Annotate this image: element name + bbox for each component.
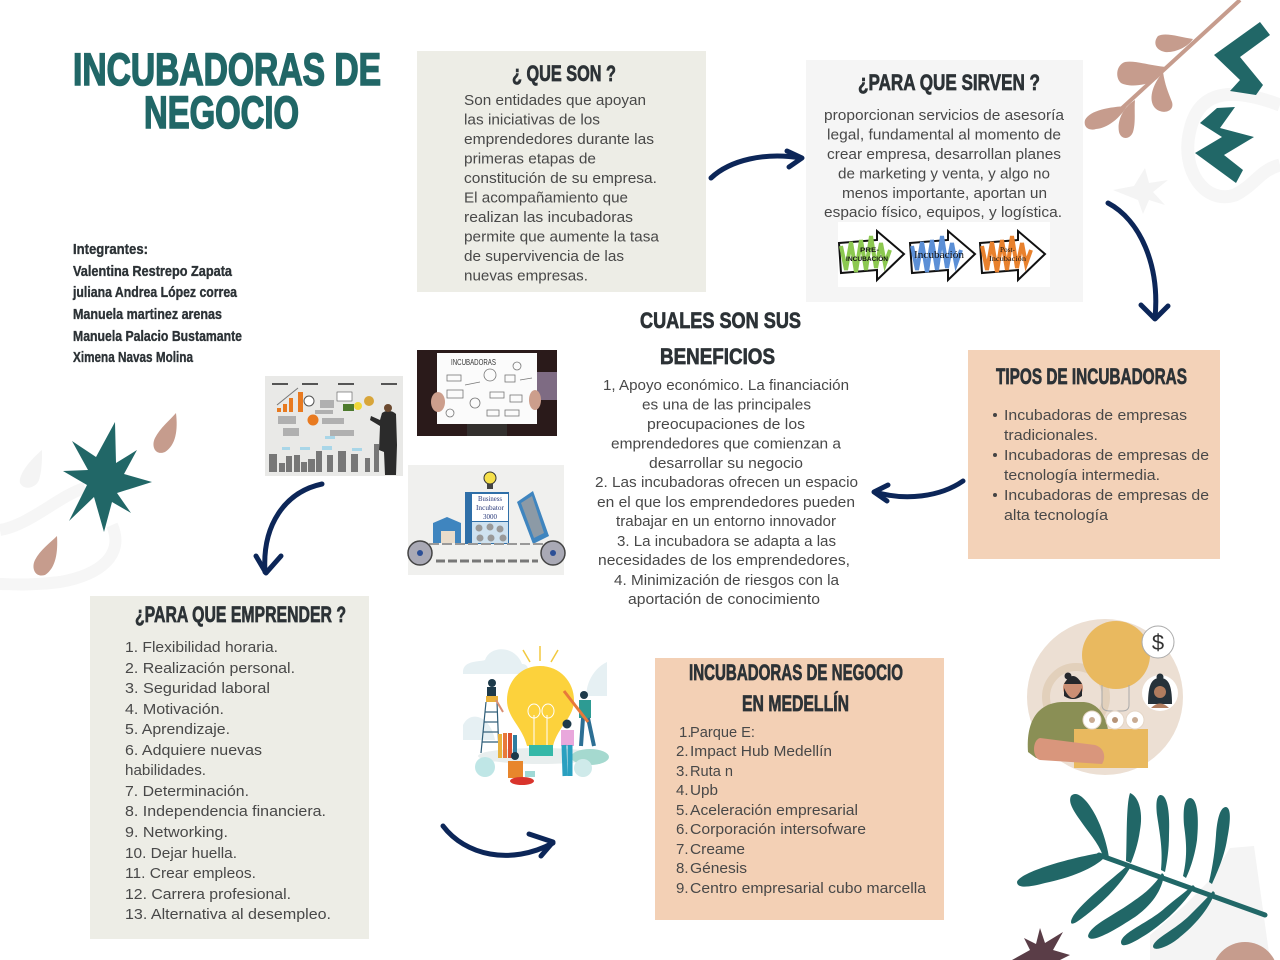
- text: que son: primeras etapas de: [464, 150, 596, 168]
- text: beneficios: es una de las principales: [642, 396, 811, 414]
- list: medellin: 2.: [676, 743, 689, 760]
- text: que son: El acompañamiento que: [464, 190, 628, 206]
- text: para que sirven: de marketing y venta, y algo no: [838, 166, 1050, 182]
- icon: light bulb: [484, 472, 496, 489]
- list: tipos: alta tecnología: [1004, 507, 1109, 524]
- text: beneficios: [595, 377, 858, 608]
- list: medellin: Corporación intersofware: [690, 821, 866, 838]
- heading: medellin: [689, 660, 903, 716]
- list: medellin: 7.: [676, 841, 689, 858]
- heading: cuales son sus beneficios: CUALES SON SUS: [640, 308, 801, 333]
- text: que son: constitución de su empresa.: [464, 170, 657, 187]
- heading: cuales son sus beneficios: BENEFICIOS: [660, 344, 775, 369]
- text: que son: Son entidades que apoyan: [464, 92, 646, 109]
- text: para que sirven: proporcionan servicios de asesoría: [824, 107, 1065, 124]
- list: medellin: Creame: [690, 841, 745, 858]
- list: motivos: 3. Seguridad laboral: [125, 680, 270, 697]
- text: beneficios: 3. La incubadora se adapta a las: [617, 533, 836, 550]
- text: para que sirven: [824, 107, 1065, 221]
- list: motivos: 9. Networking.: [125, 824, 228, 841]
- heading: para que emprender: ¿PARA QUE EMPRENDER ?: [135, 602, 346, 627]
- illustration: entrepreneur with box and bulb: $: [1152, 630, 1164, 655]
- text: beneficios: preocupaciones de los: [647, 416, 805, 433]
- text: beneficios: 2. Las incubadoras ofrecen un espacio: [595, 474, 858, 491]
- title: [73, 44, 381, 138]
- arrow: tipos to beneficios: [874, 481, 963, 501]
- list: motivos: 13. Alternativa al desempleo.: [125, 906, 331, 923]
- list: tipos: Incubadoras de empresas: [1004, 407, 1187, 424]
- list: medellin: Ruta n: [690, 763, 733, 780]
- list: medellin: 4.: [676, 782, 689, 799]
- text: beneficios: desarrollar su negocio: [649, 455, 803, 472]
- heading: medellin: EN MEDELLÍN: [742, 691, 849, 716]
- arrow: bulb to medellin: [443, 826, 553, 856]
- text: beneficios: 1, Apoyo económico. La financiación: [603, 377, 849, 394]
- text: que son: de supervivencia de las: [464, 248, 624, 265]
- heading: para que sirven: ¿PARA QUE SIRVEN ?: [858, 70, 1040, 95]
- text: que son: permite que aumente la tasa: [464, 228, 660, 246]
- team members list: juliana Andrea López correa: [72, 285, 238, 301]
- list: medellin: Upb: [690, 782, 718, 799]
- team members list: Integrantes:: [73, 242, 148, 258]
- title: NEGOCIO: [144, 87, 299, 138]
- text: beneficios: necesidades de los emprendedores,: [598, 552, 850, 569]
- image: business incubator machine: Business: [478, 495, 502, 503]
- text: que son: nuevas empresas.: [464, 268, 588, 284]
- list: motivos: 11. Crear empleos.: [125, 865, 256, 882]
- image: man drawing business chart on wall: [265, 376, 403, 476]
- decoration: bottom right fern: [1012, 793, 1278, 960]
- list: medellin: [676, 724, 927, 897]
- list: tipos: tecnología intermedia.: [1004, 467, 1160, 484]
- team members list: Manuela martinez arenas: [73, 307, 222, 323]
- image: business incubator machine: 3000: [483, 513, 498, 521]
- list: medellin: 8.: [676, 860, 689, 877]
- decoration: left star and drops: [0, 413, 177, 584]
- image: incubation stage arrows: Post-: [1000, 246, 1016, 254]
- image: incubation stage arrows: Incubación: [989, 255, 1027, 263]
- team members list: Manuela Palacio Bustamante: [73, 329, 242, 345]
- text: para que sirven: espacio físico, equipos, y logística.: [824, 204, 1062, 221]
- list: medellin: Génesis: [690, 860, 747, 877]
- arrow: que son to para que sirven: [711, 151, 802, 178]
- list: motivos: 4. Motivación.: [125, 701, 224, 718]
- arrow: para que sirven to tipos: [1108, 203, 1168, 319]
- list: medellin: 9.: [676, 880, 689, 897]
- text: que son: las iniciativas de los: [464, 112, 600, 128]
- image: business incubator machine: [408, 465, 565, 575]
- image: incubation stage arrows: Incubación: [914, 250, 964, 261]
- list: tipos: tradicionales.: [1004, 427, 1098, 444]
- text: para que sirven: menos importante, aportan un: [842, 185, 1047, 202]
- text: beneficios: trabajar en un entorno innovador: [616, 513, 836, 530]
- image: hands holding incubadoras sketch sheet: [417, 350, 557, 436]
- heading: medellin: INCUBADORAS DE NEGOCIO: [689, 660, 903, 685]
- text: beneficios: aportación de conocimiento: [628, 591, 820, 608]
- text: para que sirven: crear empresa, desarrollan planes: [827, 146, 1061, 163]
- image: incubation stage arrows: PRE-: [860, 247, 879, 254]
- list: tipos: [993, 407, 1209, 524]
- list: motivos: habilidades.: [125, 762, 206, 779]
- list: motivos: 10. Dejar huella.: [125, 845, 237, 862]
- heading: tipos: TIPOS DE INCUBADORAS: [996, 364, 1187, 389]
- illustration: entrepreneur with box and bulb: [1027, 619, 1183, 775]
- text: que son: realizan las incubadoras: [464, 209, 633, 226]
- panel: tipos de incubadoras: [968, 350, 1220, 559]
- heading: cuales son sus beneficios: [640, 308, 801, 369]
- list: medellin: Impact Hub Medellín: [690, 743, 832, 760]
- illustration: team around light bulb: [463, 646, 609, 785]
- list: motivos: 5. Aprendizaje.: [125, 721, 230, 738]
- team members list: Valentina Restrepo Zapata: [73, 264, 233, 280]
- image: business incubator machine: Incubator: [476, 504, 505, 512]
- image: incubation stage arrows: [838, 222, 1050, 287]
- list: tipos: Incubadoras de empresas de: [1004, 487, 1209, 504]
- list: tipos: Incubadoras de empresas de: [1004, 447, 1209, 464]
- image: hands holding incubadoras sketch sheet: INCUBADORAS: [451, 358, 496, 367]
- list: medellin: Centro empresarial cubo marcella: [690, 880, 927, 897]
- list: motivos: 1. Flexibilidad horaria.: [125, 639, 278, 656]
- list: motivos: [125, 639, 331, 923]
- list: motivos: 8. Independencia financiera.: [125, 803, 326, 820]
- list: medellin: 3.: [676, 763, 689, 780]
- list: medellin: 1.: [679, 724, 692, 741]
- text: beneficios: en el que los emprendedores pueden: [597, 494, 855, 511]
- text: que son: emprendedores durante las: [464, 131, 654, 148]
- title: INCUBADORAS DE: [73, 44, 381, 95]
- list: motivos: 2. Realización personal.: [125, 660, 295, 677]
- list: motivos: 7. Determinación.: [125, 783, 249, 800]
- list: medellin: Parque E:: [690, 724, 755, 741]
- list: medellin: 5.: [676, 802, 689, 819]
- list: medellin: Aceleración empresarial: [690, 802, 858, 819]
- panel: incubadoras de negocio en medellin: [655, 658, 944, 920]
- panel: que son: [417, 51, 706, 292]
- text: para que sirven: legal, fundamental al momento de: [827, 126, 1061, 144]
- decoration: top right branch and zigzags: [1085, 0, 1280, 214]
- list: motivos: 12. Carrera profesional.: [125, 886, 291, 903]
- team members list: Ximena Navas Molina: [73, 350, 194, 366]
- list: motivos: 6. Adquiere nuevas: [125, 742, 262, 759]
- list: medellin: 6.: [676, 821, 689, 838]
- text: que son: [464, 92, 660, 284]
- team members list: [72, 242, 242, 366]
- heading: que son: ¿ QUE SON ?: [512, 61, 616, 86]
- text: beneficios: 4. Minimización de riesgos con la: [614, 572, 840, 589]
- image: incubation stage arrows: INCUBACIÓN: [846, 254, 888, 263]
- panel: para que sirven: [806, 60, 1083, 302]
- panel: para que emprender: [90, 596, 369, 939]
- text: beneficios: emprendedores que comienzan a: [611, 436, 842, 452]
- arrow: images to para que emprender: [256, 484, 322, 573]
